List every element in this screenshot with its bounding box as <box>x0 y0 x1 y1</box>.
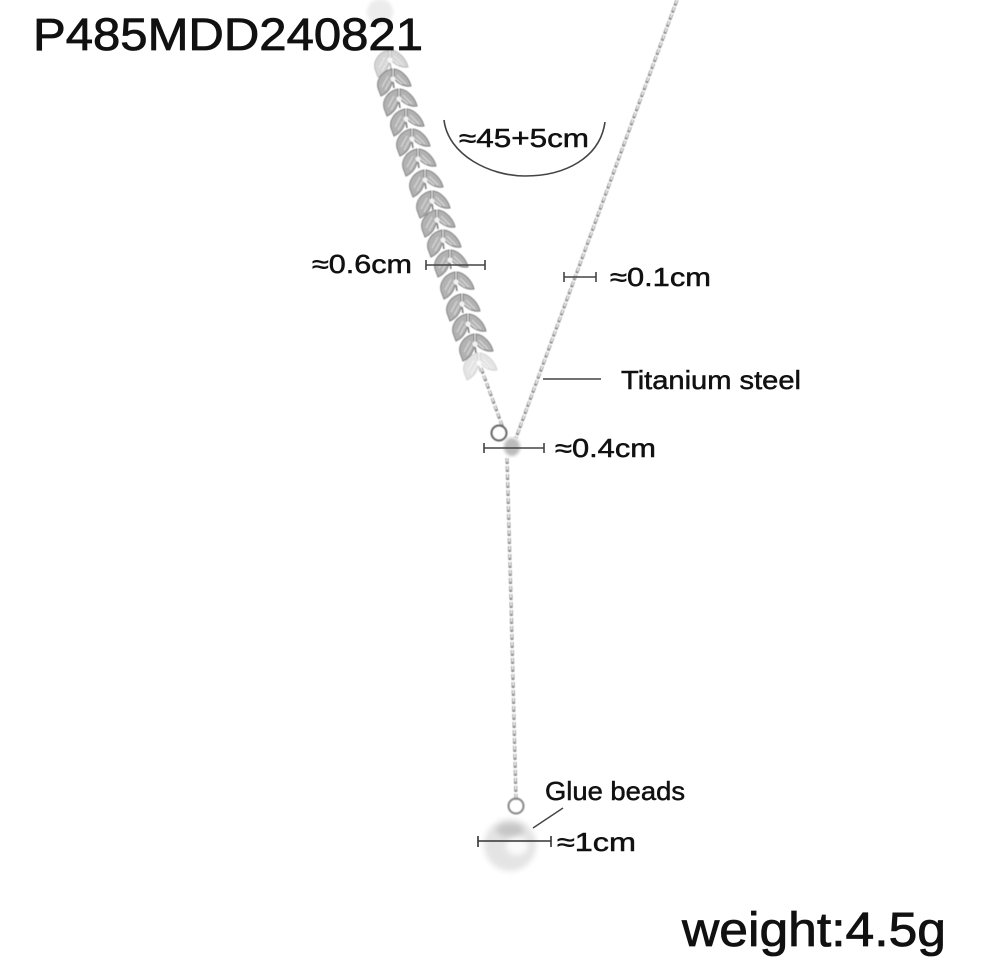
measure: clasp width <box>484 443 544 453</box>
measure: chain width <box>564 272 596 282</box>
last pale leaf <box>464 353 497 380</box>
label: material: Titanium steel <box>621 365 801 395</box>
leader: bead <box>533 808 563 828</box>
label: chain width: ≈0.1cm <box>610 262 711 292</box>
label: leaf width: ≈0.6cm <box>312 249 412 279</box>
necklace leaf chain <box>367 0 497 380</box>
title: P485MDD240821 <box>33 9 423 60</box>
label: bead type: Glue beads <box>545 776 685 806</box>
leader: material <box>543 378 601 380</box>
weight label: weight:4.5g <box>681 904 946 957</box>
measure: leaf width <box>426 260 485 270</box>
label: clasp width: ≈0.4cm <box>555 433 656 463</box>
pearl pendant <box>484 819 536 871</box>
clasp bead <box>504 438 520 456</box>
length arc <box>444 120 605 176</box>
top pearl <box>367 0 393 25</box>
necklace chains <box>481 0 677 814</box>
first pale leaf <box>375 50 408 77</box>
label: length: ≈45+5cm <box>459 123 589 153</box>
label: bead width: ≈1cm <box>557 827 636 857</box>
measure: bead width <box>478 836 551 847</box>
